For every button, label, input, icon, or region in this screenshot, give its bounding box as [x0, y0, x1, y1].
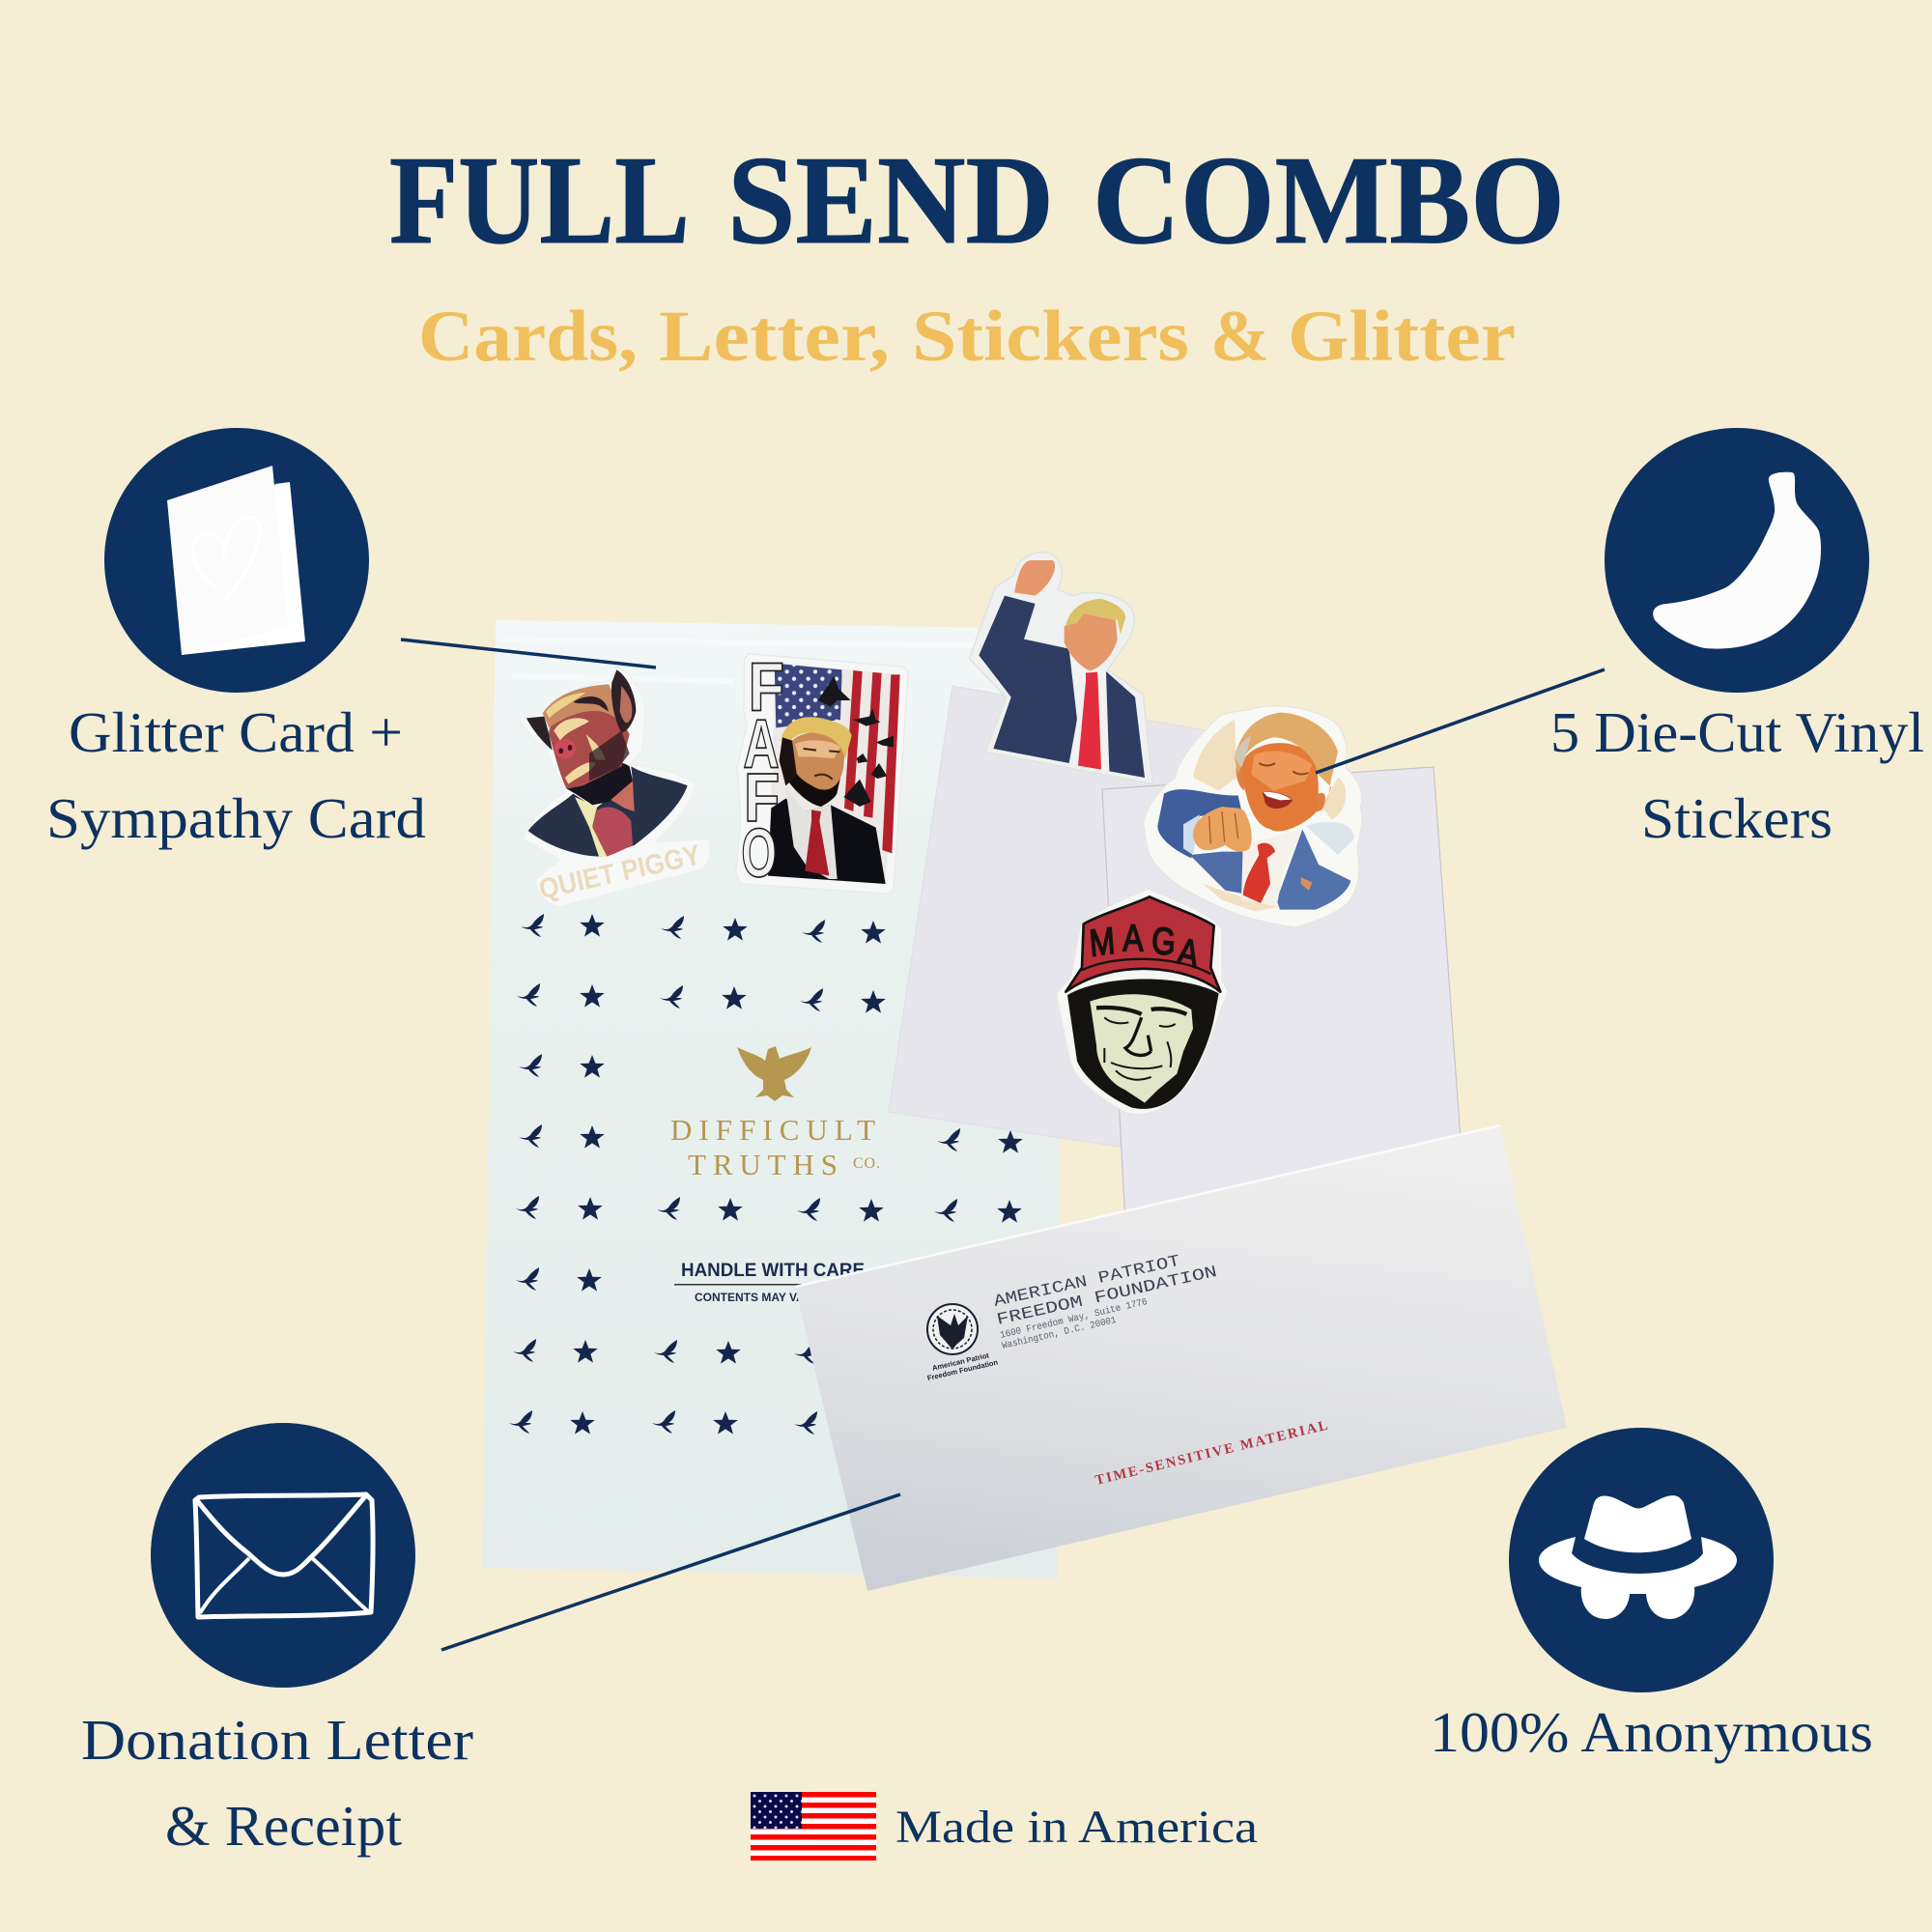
tie [1078, 672, 1101, 770]
ears [1236, 763, 1325, 813]
subtitle: Letter, [659, 297, 890, 377]
return address: 1600 Freedom Way, Suite 1776 [999, 1296, 1149, 1342]
sticker: quiet piggy [520, 667, 710, 906]
label: glitter card: Sympathy Card [46, 786, 426, 850]
face pale [1090, 994, 1193, 1103]
MAGA text: MAGA [1088, 917, 1202, 977]
pig ear right [611, 669, 636, 732]
sticker: MAGA cap [1056, 889, 1229, 1115]
pig shirt [575, 797, 609, 857]
subtitle: Cards, [418, 297, 638, 377]
icon: anonymous hat [1509, 1428, 1774, 1692]
subtitle: & [1210, 297, 1269, 377]
icon: american flag [751, 1792, 876, 1861]
subtitle: Glitter [1288, 297, 1516, 377]
FAFO letters: F [749, 648, 784, 725]
shirt [1069, 649, 1109, 771]
flag stripes [844, 670, 900, 853]
pig suit [528, 766, 688, 857]
suit right [1277, 829, 1350, 910]
pig head [549, 704, 630, 789]
seal caption: American Patriot [931, 1350, 990, 1373]
tie [1243, 843, 1275, 903]
shirt [1241, 829, 1302, 906]
sticker: FAFO [736, 648, 908, 894]
fist [1014, 560, 1055, 596]
icon: glitter card [104, 428, 369, 693]
return address [992, 1253, 1219, 1352]
handle with care text: HANDLE WITH CARE [681, 1261, 865, 1281]
hair [781, 717, 852, 760]
title: COMBO [1093, 130, 1565, 270]
label: made in america: Made in America [895, 1802, 1258, 1853]
shirt [785, 789, 838, 879]
pig nose [554, 739, 576, 758]
return address: FREEDOM FOUNDATION [995, 1264, 1219, 1330]
sticker: raised fist [969, 553, 1152, 784]
subtitle: Stickers [912, 297, 1189, 377]
label: anonymous: 100% Anonymous [1430, 1700, 1873, 1764]
label: glitter card: Glitter Card + [69, 700, 403, 764]
mailer gold eagle logo [737, 1046, 811, 1101]
suit [979, 596, 1077, 763]
pig tie [592, 808, 633, 857]
label: die-cut stickers: Stickers [1641, 786, 1833, 850]
pig neck shadow [567, 762, 633, 805]
foundation seal [927, 1304, 978, 1354]
label: die-cut stickers [1550, 700, 1924, 850]
mailer brand text: TRUTHS [688, 1148, 838, 1181]
handle with care text [674, 1261, 867, 1304]
panel: back envelope right [1102, 767, 1473, 1352]
sticker: pointing and laughing [1143, 706, 1362, 927]
pig ear left [526, 717, 553, 751]
return address: AMERICAN PATRIOT [992, 1253, 1182, 1312]
jets and helicopters [818, 676, 894, 807]
label: donation letter: Donation Letter [81, 1708, 473, 1772]
suit sleeve [1157, 789, 1241, 858]
tie [805, 810, 829, 876]
FAFO letters: O [741, 814, 777, 892]
cap band line [1082, 959, 1210, 974]
mailer brand text: DIFFICULT [670, 1113, 875, 1147]
return address: Washington, D.C. 20001 [1001, 1315, 1118, 1352]
FAFO letters [741, 648, 784, 892]
label: die-cut stickers: 5 Die-Cut Vinyl [1550, 700, 1924, 764]
face black base [1067, 980, 1219, 1109]
handle with care text: CONTENTS MAY VARY [695, 1291, 820, 1304]
arrow: to stickers [1316, 669, 1605, 773]
title: SEND [727, 130, 1054, 270]
suit [768, 799, 886, 884]
panel: white poly mailer [482, 620, 1060, 1578]
label: donation letter [81, 1708, 473, 1858]
label: glitter card [46, 700, 426, 850]
pointing hand [1193, 807, 1252, 852]
flag pin [1301, 877, 1312, 891]
icon: banana [1605, 428, 1869, 693]
title [389, 130, 1565, 270]
hair [1235, 713, 1338, 819]
seal caption: Freedom Foundation [926, 1357, 999, 1382]
flag canton [775, 664, 842, 727]
mailer star and bird pattern [509, 914, 1023, 1435]
neck shadow [780, 737, 843, 807]
mouth [1263, 792, 1293, 809]
panel: front donation envelope [795, 1125, 1567, 1591]
red cap [1065, 896, 1220, 992]
arrow: to letter [441, 1494, 900, 1650]
time-sensitive stamp: TIME-SENSITIVE MATERIAL [1094, 1418, 1329, 1489]
panel: back envelope left [889, 686, 1227, 1148]
face [1241, 743, 1319, 831]
cuff [1183, 814, 1200, 855]
face [1065, 613, 1118, 670]
icon: envelope [151, 1423, 415, 1688]
label: donation letter: & Receipt [165, 1794, 403, 1858]
pig face highlights [554, 718, 606, 784]
subtitle [418, 297, 1516, 377]
hair [1065, 599, 1125, 635]
quiet piggy label: QUIET PIGGY [536, 838, 704, 905]
mailer brand text [670, 1113, 880, 1181]
face [792, 732, 845, 789]
title: FULL [389, 130, 690, 270]
mailer brand text: CO. [853, 1155, 880, 1172]
watercolor wash [1193, 720, 1346, 819]
FAFO letters: F [744, 759, 780, 837]
pig hair [543, 684, 619, 727]
facial lines [1096, 1008, 1186, 1014]
arrow: to card [401, 639, 656, 668]
FAFO letters: A [743, 706, 780, 783]
flag field [768, 664, 900, 884]
